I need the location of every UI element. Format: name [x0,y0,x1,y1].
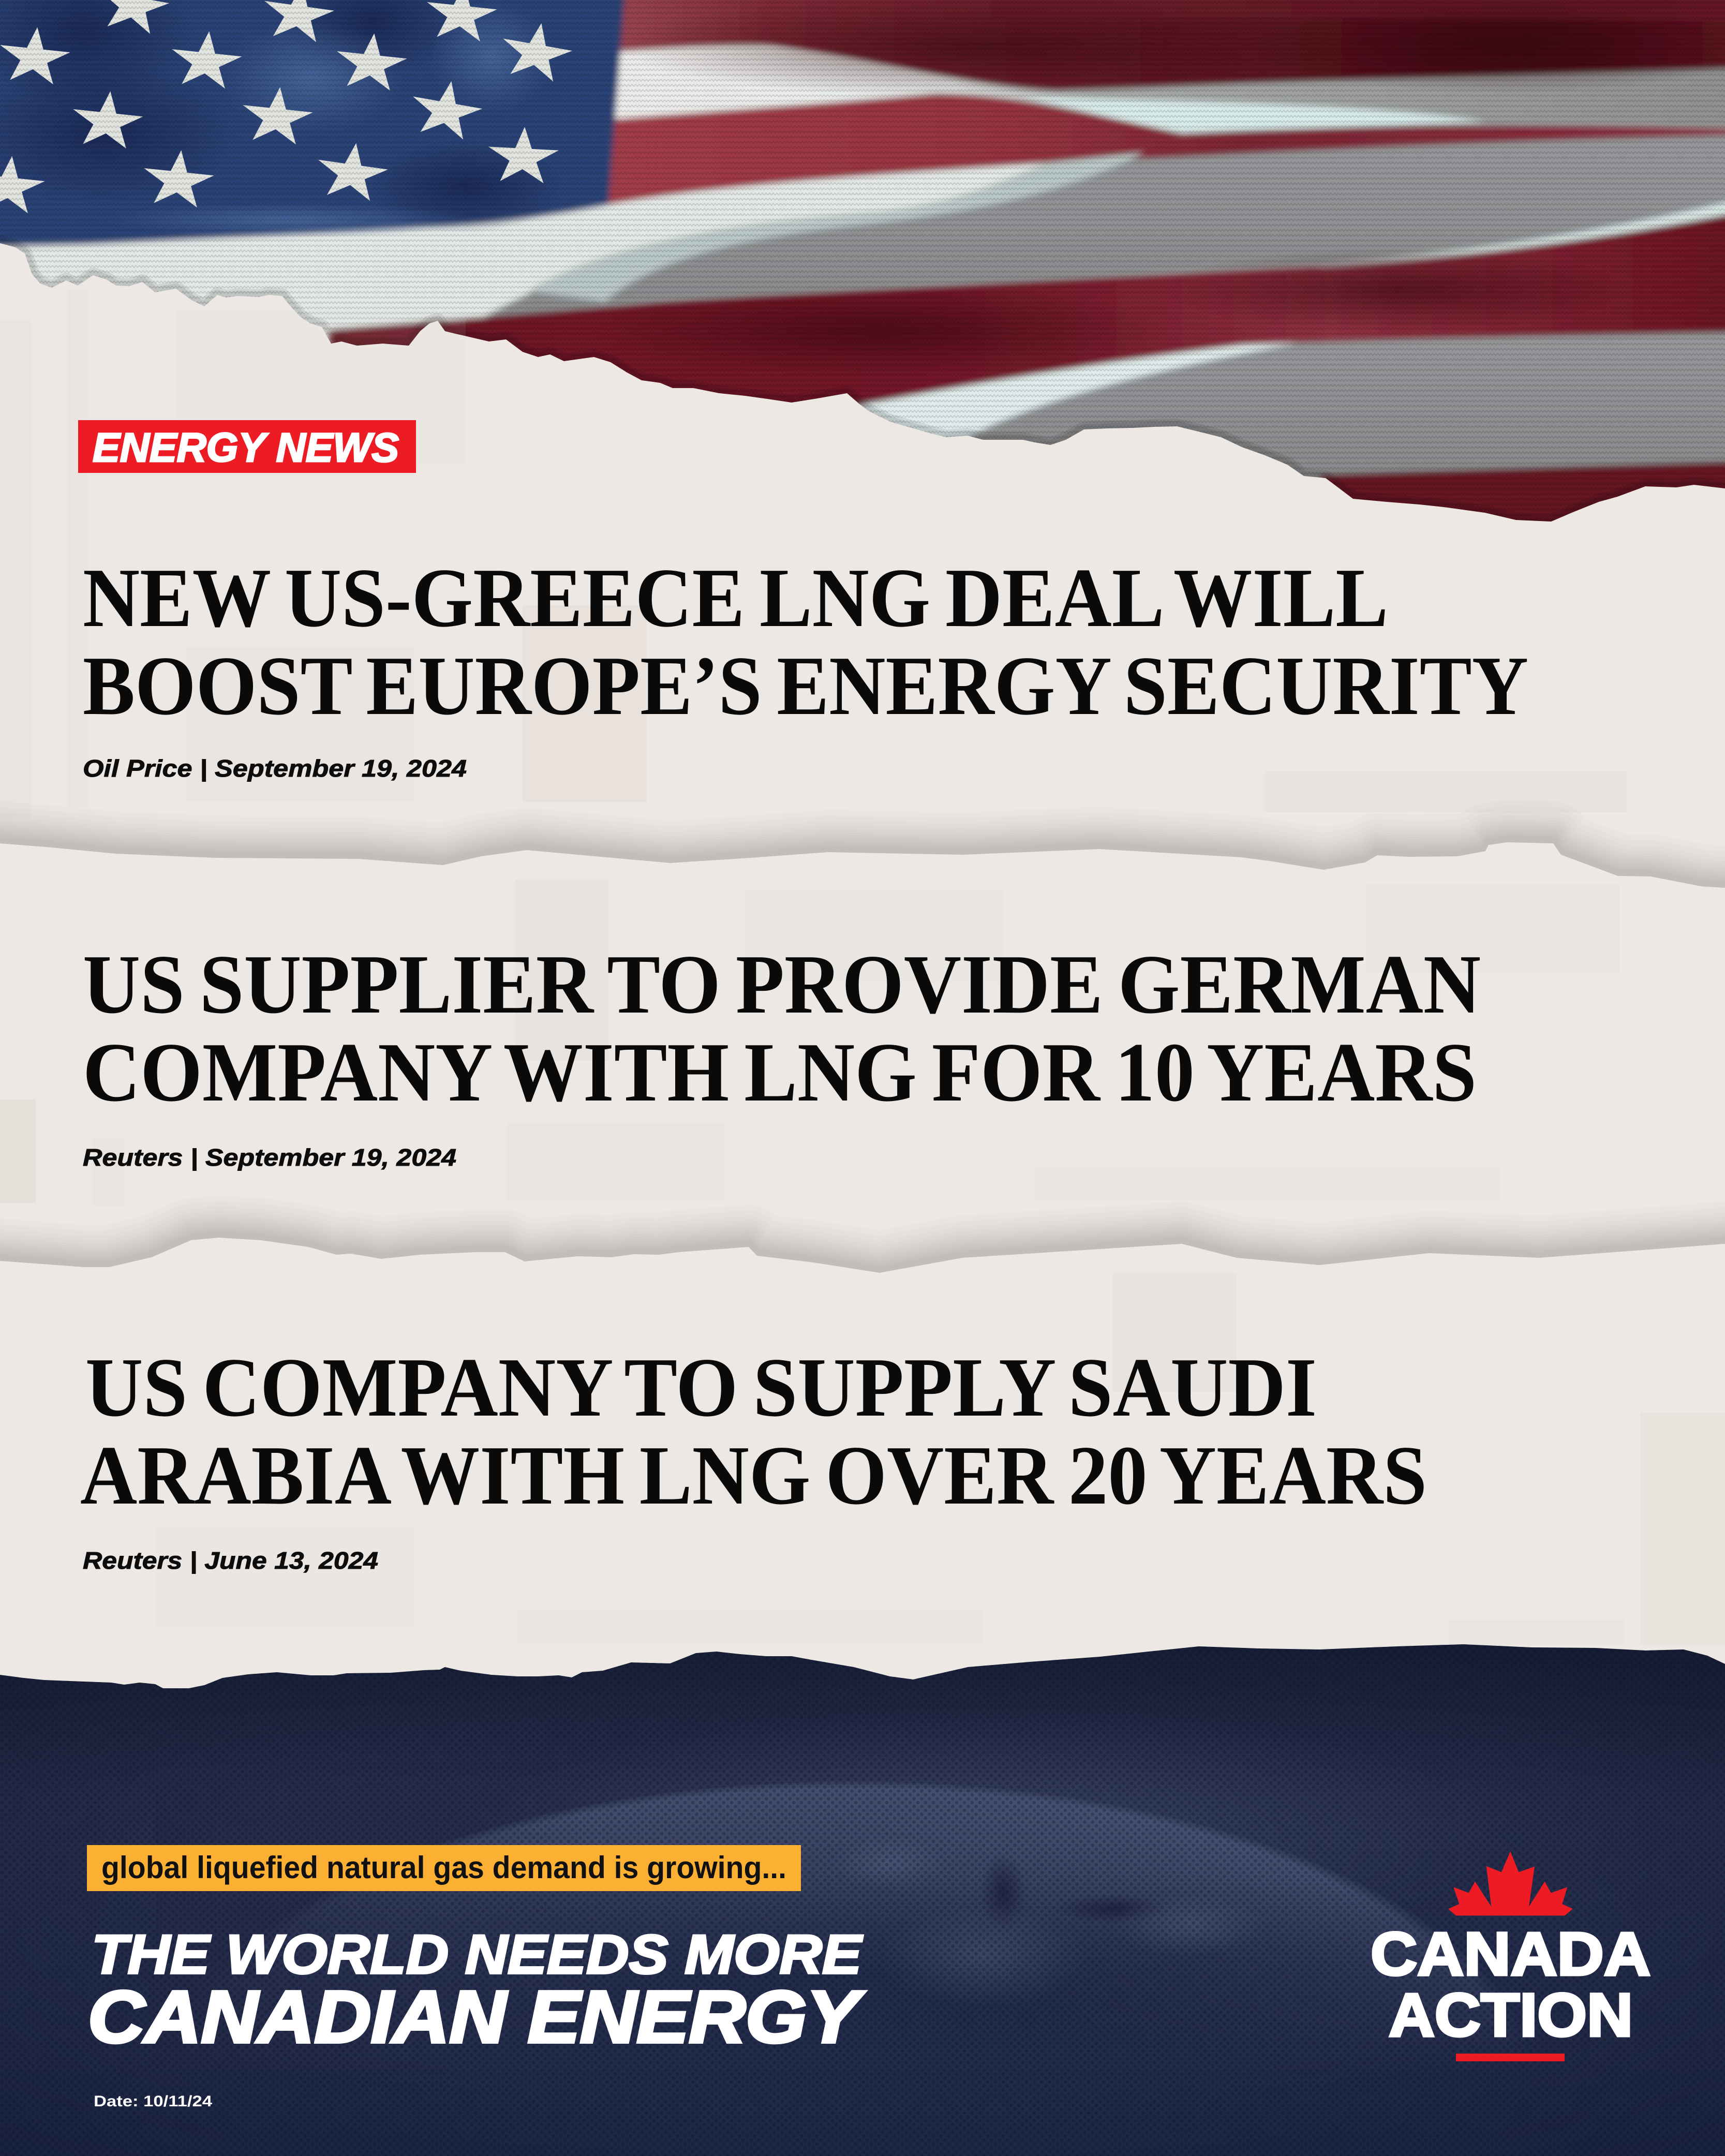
headline block two [83,938,1481,1171]
flag second white stripe [611,46,1725,133]
newspaper ghost print on sheet two [0,880,1619,1206]
flag third red stripe [330,208,1725,450]
slogan: CANADIAN ENERGY [88,1976,865,2058]
headline three: US COMPANY TO SUPPLY SAUDI [85,1341,1317,1434]
headline one: NEW US-GREECE LNG DEAL WILL [83,552,1388,645]
energy news tag: ENERGY NEWS [93,424,399,470]
paper sheet one, torn top edge [0,239,1725,1009]
stars on canton [0,0,576,215]
fabric weave texture [0,0,1725,543]
paper sheet three, torn top edge with shadow [0,1235,1725,1863]
headline two: US SUPPLIER TO PROVIDE GERMAN [83,938,1481,1031]
dark navy footer panel with globe [0,1644,1725,2156]
slogan [88,1923,865,2058]
yellow callout tag: global liquefied natural gas demand is growing... [101,1850,786,1885]
flag blue canton [0,0,625,247]
date: Date: 10/11/24 [94,2093,212,2110]
flag second red stripe [605,94,1725,205]
icon: maple leaf [1448,1851,1573,1915]
globe glow [0,1707,1725,2070]
logo wordmark: CANADA [1371,1920,1650,1988]
logo red bar [1456,2054,1565,2061]
flag third grey stripe [0,135,1725,347]
newspaper ghost print on sheet one [0,290,1627,817]
source line two: Reuters | September 19, 2024 [83,1144,456,1171]
flag bottom red stripe [1320,461,1725,541]
headline block one [78,420,1528,782]
canada action logo: ACTION [1389,1981,1633,2049]
flag shading [0,0,1725,378]
canada action logo [1371,1851,1650,2061]
paper sheet two, torn top edge with shadow [0,836,1725,1423]
headline two: COMPANY WITH LNG FOR 10 YEARS [83,1026,1477,1119]
flag fourth grey stripe [858,332,1725,502]
newspaper ghost print on sheet three [155,1273,1725,1645]
flag top red stripe [611,0,1725,91]
headline three: ARABIA WITH LNG OVER 20 YEARS [80,1429,1427,1522]
headline one: BOOST EUROPE’S ENERGY SECURITY [83,640,1528,733]
source line three: Reuters | June 13, 2024 [83,1547,378,1574]
american flag photo [0,0,1725,543]
dot mesh overlay [0,1644,1725,2156]
slogan: THE WORLD NEEDS MORE [92,1923,864,1985]
headline block three [80,1341,1427,1574]
source line one: Oil Price | September 19, 2024 [83,755,467,782]
